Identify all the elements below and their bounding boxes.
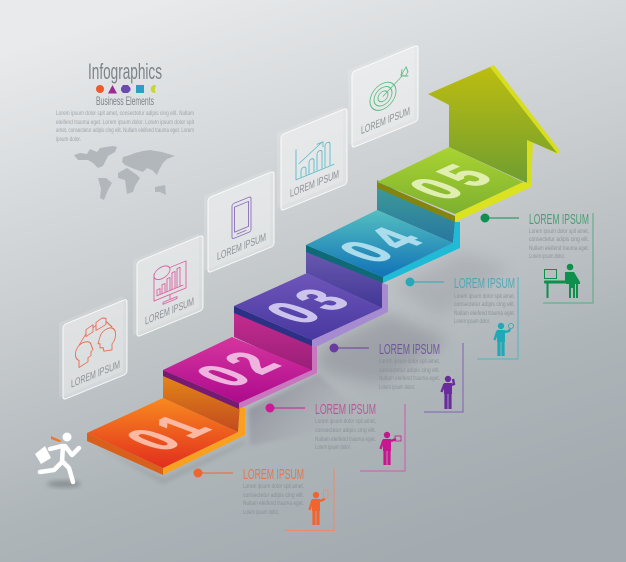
body text: consectetur adipis cing elit. [529, 236, 589, 243]
body text [315, 418, 376, 451]
stair: step 01 [87, 398, 245, 475]
body text: Lorem ipsum dolor spit amet, [379, 358, 440, 365]
person at desk [544, 264, 580, 298]
heading: LOREM IPSUM [379, 341, 440, 358]
stair: step 05 [377, 147, 531, 243]
callout 4 [406, 275, 518, 359]
icon: target [370, 66, 408, 115]
icon: heads [75, 312, 116, 369]
heading: LOREM IPSUM [315, 401, 376, 418]
card 5: target [348, 43, 418, 148]
card 2: monitor [133, 233, 203, 337]
body text: Lorem ipsum dolor spit amet, [454, 293, 515, 300]
stair: step 02 [163, 337, 317, 432]
body text: Lorem ipsum dolor spit amet, [315, 418, 376, 425]
person [442, 376, 454, 409]
body text: Lorem ipsum dolor. [379, 384, 415, 391]
card 4: growth chart [277, 106, 347, 211]
stair: step 03 [234, 273, 388, 372]
runner [35, 432, 81, 488]
body text: Nullam eleifend trauma eget. [454, 310, 515, 317]
description [56, 110, 194, 143]
person [494, 323, 514, 356]
person [310, 490, 328, 525]
number 04: 04 [324, 222, 439, 269]
body text: consectetur adipis cing elit. [379, 367, 440, 374]
callout 5 [481, 211, 593, 303]
card 3: phone [204, 169, 274, 273]
callout 1 [194, 466, 334, 530]
body text: consectetur adipis cing elit. [454, 301, 515, 308]
stair: step 04 [306, 210, 460, 308]
bracket [543, 213, 593, 303]
body text: Nullam eleifend trauma eget. [315, 436, 376, 443]
body text: Nullam eleifend trauma eget. [529, 245, 589, 252]
body text: Lorem ipsum dolor spit amet, [243, 483, 304, 490]
label: LOREM IPSUM [217, 232, 266, 263]
body text: consectetur adipis cing elit. [315, 427, 376, 434]
connector [266, 404, 305, 412]
description: amet, consectetur adipis cing elit. Nullam eleifend trauma eget. Lorem [56, 127, 194, 134]
body text: Nullam eleifend trauma eget. [379, 375, 440, 382]
heading: LOREM IPSUM [243, 466, 304, 483]
title: Infographics [88, 59, 162, 84]
label: LOREM IPSUM [361, 106, 410, 137]
person [380, 432, 401, 465]
arrow [428, 65, 560, 183]
number 03: 03 [251, 283, 365, 330]
bracket [424, 343, 463, 412]
description: eleifend trauma eget. Lorem ipsum dolor. Lorem ipsum dolor spit [56, 119, 194, 126]
number 02: 02 [181, 346, 295, 393]
card 1: teamwork [59, 296, 127, 400]
label: LOREM IPSUM [71, 359, 120, 391]
stair shadows [95, 250, 510, 484]
body text [529, 228, 589, 260]
body text: Lorem ipsum dolor. [454, 318, 490, 325]
icon: monitor [154, 257, 186, 308]
callout 2 [266, 401, 405, 471]
bracket [285, 468, 334, 530]
subtitle: Business Elements [96, 94, 154, 108]
world map [74, 146, 175, 200]
label: LOREM IPSUM [290, 169, 339, 200]
body text: Nullam eleifend trauma eget. [243, 500, 304, 507]
header block [56, 59, 194, 143]
label: LOREM IPSUM [145, 296, 194, 328]
number 01: 01 [111, 410, 225, 457]
body text [379, 358, 440, 391]
description: ipsum dolor. [56, 136, 81, 143]
body text: Lorem ipsum dolor. [243, 509, 279, 516]
body text: Lorem ipsum dolor spit amet, [529, 228, 589, 235]
body text [454, 293, 515, 325]
body text: Lorem ipsum dolor. [529, 253, 565, 260]
callout 3 [330, 341, 463, 412]
connector [194, 469, 233, 477]
icon: phone [232, 196, 251, 239]
body text: Lorem ipsum dolor. [315, 444, 351, 451]
body text [243, 483, 304, 516]
connector [481, 214, 519, 222]
icon: bar chart [296, 134, 334, 180]
connector [330, 344, 369, 352]
bracket [360, 404, 405, 471]
bracket [477, 277, 518, 359]
shape icons row [96, 85, 156, 94]
body text: consectetur adipis cing elit. [243, 492, 304, 499]
heading: LOREM IPSUM [454, 275, 515, 292]
connector [406, 278, 444, 286]
description: Lorem ipsum dolor spit amet, consectetur adipis cing elit. Nullam [56, 110, 194, 117]
number 05: 05 [394, 159, 508, 206]
